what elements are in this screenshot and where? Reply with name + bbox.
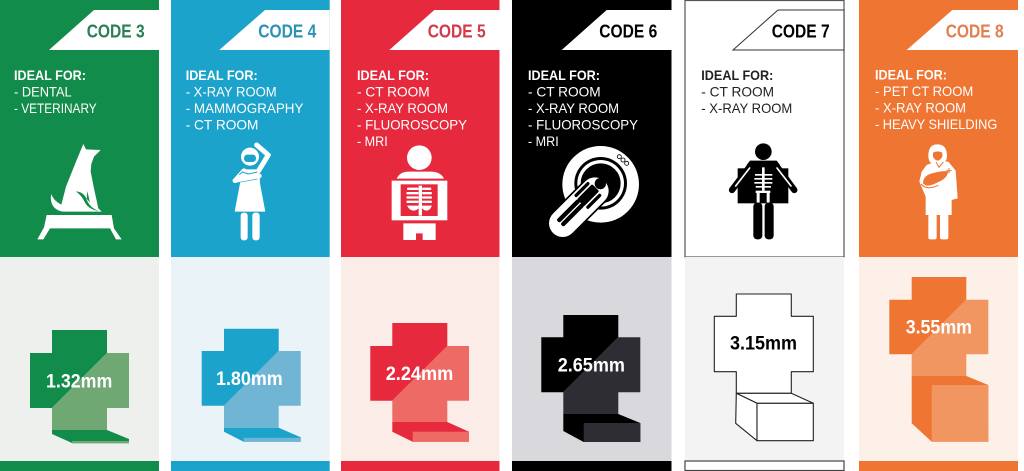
heading: code 6	[562, 10, 672, 50]
icon: mri scanner	[553, 146, 639, 231]
text block: ideal for code 6: - MRI	[528, 133, 559, 149]
panel: code 7	[685, 0, 844, 470]
text block: ideal for code 6	[528, 67, 639, 149]
panel: code 3	[0, 0, 159, 471]
text block: ideal for code 7: - X-RAY ROOM	[701, 100, 792, 116]
icon: woman mammography	[235, 145, 268, 240]
text block: ideal for code 8: - PET CT ROOM	[875, 83, 973, 99]
text block: ideal for code 8	[875, 66, 997, 132]
text block: ideal for code 4	[186, 67, 304, 132]
heading: code 7: CODE 7	[772, 22, 830, 42]
heading: code 5: CODE 5	[428, 22, 486, 42]
text block: ideal for code 4: IDEAL FOR:	[186, 67, 258, 83]
heading: code 4: CODE 4	[258, 22, 316, 42]
text block: ideal for code 5: - CT ROOM	[357, 84, 430, 100]
chart: 3.55mm lead cross and box	[889, 277, 988, 442]
chart: 2.65mm lead cross	[541, 315, 640, 442]
chart: 3.55mm lead cross and box: 3.55mm	[906, 317, 972, 338]
text block: ideal for code 8: - X-RAY ROOM	[875, 100, 966, 116]
heading: code 3: CODE 3	[87, 22, 145, 42]
heading: code 8: CODE 8	[946, 22, 1004, 42]
text block: ideal for code 7: IDEAL FOR:	[701, 67, 773, 83]
text block: ideal for code 3: - DENTAL	[14, 84, 72, 100]
chart: 2.24mm lead cross	[370, 323, 469, 442]
text block: ideal for code 4: - MAMMOGRAPHY	[186, 100, 304, 116]
panel: code 4	[171, 0, 330, 471]
chart: 1.80mm lead cross	[202, 329, 301, 442]
icon: dog on table	[37, 144, 122, 239]
text block: ideal for code 7	[701, 67, 792, 116]
text block: ideal for code 3: IDEAL FOR:	[14, 67, 86, 83]
text block: ideal for code 6: - CT ROOM	[528, 84, 601, 100]
text block: ideal for code 3: - VETERINARY	[14, 100, 97, 116]
heading: code 8	[907, 10, 1018, 50]
chart: 1.32mm lead cross	[30, 330, 129, 443]
text block: ideal for code 5: - FLUOROSCOPY	[357, 116, 468, 132]
heading: code 6: CODE 6	[599, 22, 657, 42]
text block: ideal for code 5	[357, 67, 468, 149]
text block: ideal for code 8: - HEAVY SHIELDING	[875, 116, 997, 132]
text block: ideal for code 5: - MRI	[357, 133, 388, 149]
chart: 2.65mm lead cross: 2.65mm	[558, 356, 625, 377]
icon: vet holding pet	[919, 144, 958, 239]
text block: ideal for code 4: - CT ROOM	[186, 116, 258, 132]
icon: chest x-ray panel	[392, 145, 447, 240]
chart: 3.15mm lead cross and box	[714, 294, 813, 441]
text block: ideal for code 6: - X-RAY ROOM	[528, 100, 619, 116]
text block: ideal for code 6: - FLUOROSCOPY	[528, 116, 639, 132]
panel: code 8	[859, 0, 1018, 471]
text block: ideal for code 6: IDEAL FOR:	[528, 67, 600, 83]
text block: ideal for code 4: - X-RAY ROOM	[186, 84, 277, 100]
heading: code 4	[219, 10, 330, 50]
chart: 2.24mm lead cross: 2.24mm	[386, 364, 453, 385]
panel: code 5	[341, 0, 500, 471]
text block: ideal for code 5: - X-RAY ROOM	[357, 100, 448, 116]
text block: ideal for code 5: IDEAL FOR:	[357, 67, 429, 83]
heading: code 5	[389, 10, 500, 50]
heading: code 7	[733, 10, 844, 50]
icon: skeleton x-ray figure	[732, 143, 794, 239]
chart: 3.15mm lead cross and box: 3.15mm	[730, 333, 797, 354]
chart: 1.80mm lead cross: 1.80mm	[216, 369, 283, 390]
text block: ideal for code 3	[14, 67, 97, 116]
heading: code 3	[49, 10, 159, 50]
panel: code 6	[512, 0, 672, 471]
chart: 1.32mm lead cross: 1.32mm	[46, 371, 112, 392]
text block: ideal for code 8: IDEAL FOR:	[875, 66, 947, 82]
text block: ideal for code 7: - CT ROOM	[701, 84, 774, 100]
